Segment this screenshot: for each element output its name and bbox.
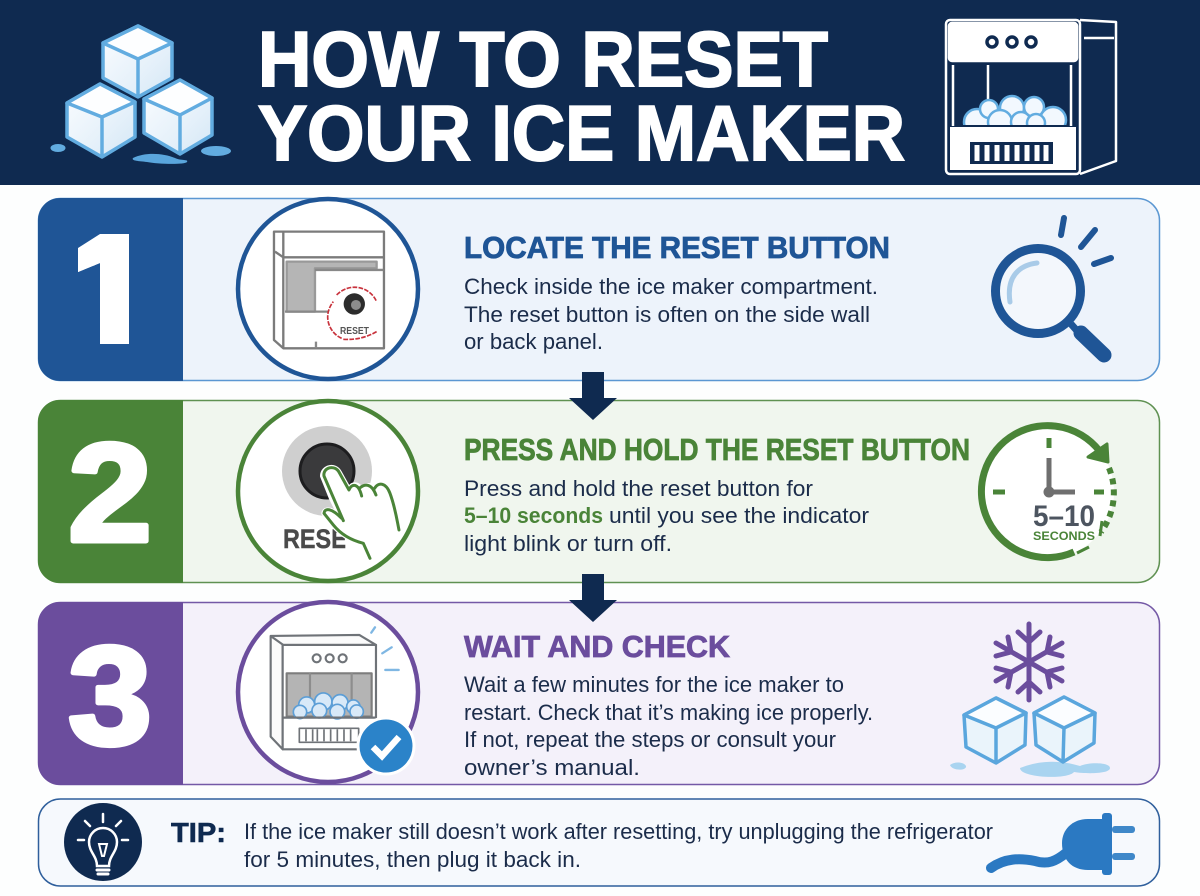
illustration: finger pressing reset button — [238, 401, 418, 581]
panel: tip — [38, 799, 1160, 886]
tip text — [244, 819, 993, 872]
icon: power plug — [991, 813, 1135, 875]
step 3 description: owner’s manual. — [464, 755, 640, 780]
step 2 description: light blink or turn off. — [464, 531, 672, 556]
illustration: finger pressing reset button: RESET — [283, 524, 361, 554]
step number 2 — [38, 400, 183, 583]
tip text: for 5 minutes, then plug it back in. — [244, 847, 581, 872]
step 2 description — [464, 476, 869, 556]
step 2 description: until you see the indicator — [609, 503, 869, 528]
title: HOW TO RESET — [258, 15, 828, 103]
icon: 5-10 seconds timer: SECONDS — [1033, 529, 1095, 543]
arrow: step 1 to step 2 — [569, 372, 617, 420]
title: YOUR ICE MAKER — [258, 89, 905, 177]
step 1 description: or back panel. — [464, 329, 603, 354]
icon: magnifying glass — [996, 218, 1111, 355]
step number 2: 2 — [68, 414, 152, 571]
step 3 description — [464, 672, 873, 780]
step 1 description — [464, 274, 878, 354]
step 3 description: Wait a few minutes for the ice maker to — [464, 672, 844, 697]
step number 3 — [38, 602, 183, 785]
header banner — [0, 0, 1200, 185]
illustration: reset button location — [238, 199, 418, 379]
step 2 description: 5–10 seconds — [464, 503, 603, 528]
step 1 description: Check inside the ice maker compartment. — [464, 274, 878, 299]
panel: step 3 — [38, 602, 1160, 785]
step 2 description: Press and hold the reset button for — [464, 476, 813, 501]
step number 3: 3 — [68, 617, 152, 774]
illustration: reset button location: RESET — [340, 325, 369, 337]
step number 1: 1 — [60, 217, 138, 374]
icon: ice maker machine — [946, 20, 1116, 174]
step number 1 — [38, 198, 183, 381]
tip label: TIP: — [171, 817, 226, 848]
step 1 description: The reset button is often on the side wall — [464, 302, 870, 327]
step 1 heading: LOCATE THE RESET BUTTON — [464, 230, 890, 265]
step 3 description: If not, repeat the steps or consult your — [464, 727, 836, 752]
step 3 description: restart. Check that it’s making ice properly. — [464, 700, 873, 725]
step 2 heading: PRESS AND HOLD THE RESET BUTTON — [464, 432, 970, 467]
tip text: If the ice maker still doesn’t work after resetting, try unplugging the refrigerator — [244, 819, 993, 844]
icon: 5-10 seconds timer: 5–10 — [1033, 500, 1095, 533]
step 3 heading: WAIT AND CHECK — [464, 629, 731, 664]
title — [258, 15, 905, 177]
icon: 5-10 seconds timer — [981, 426, 1114, 558]
icon: light bulb — [64, 803, 142, 881]
icon: snowflake and ice cubes — [950, 624, 1110, 777]
icon: stacked ice cubes — [50, 26, 231, 164]
illustration: ice maker with check mark — [238, 602, 418, 782]
panel: step 2 — [38, 400, 1160, 583]
panel: step 1 — [38, 198, 1160, 381]
arrow: step 2 to step 3 — [569, 574, 617, 622]
